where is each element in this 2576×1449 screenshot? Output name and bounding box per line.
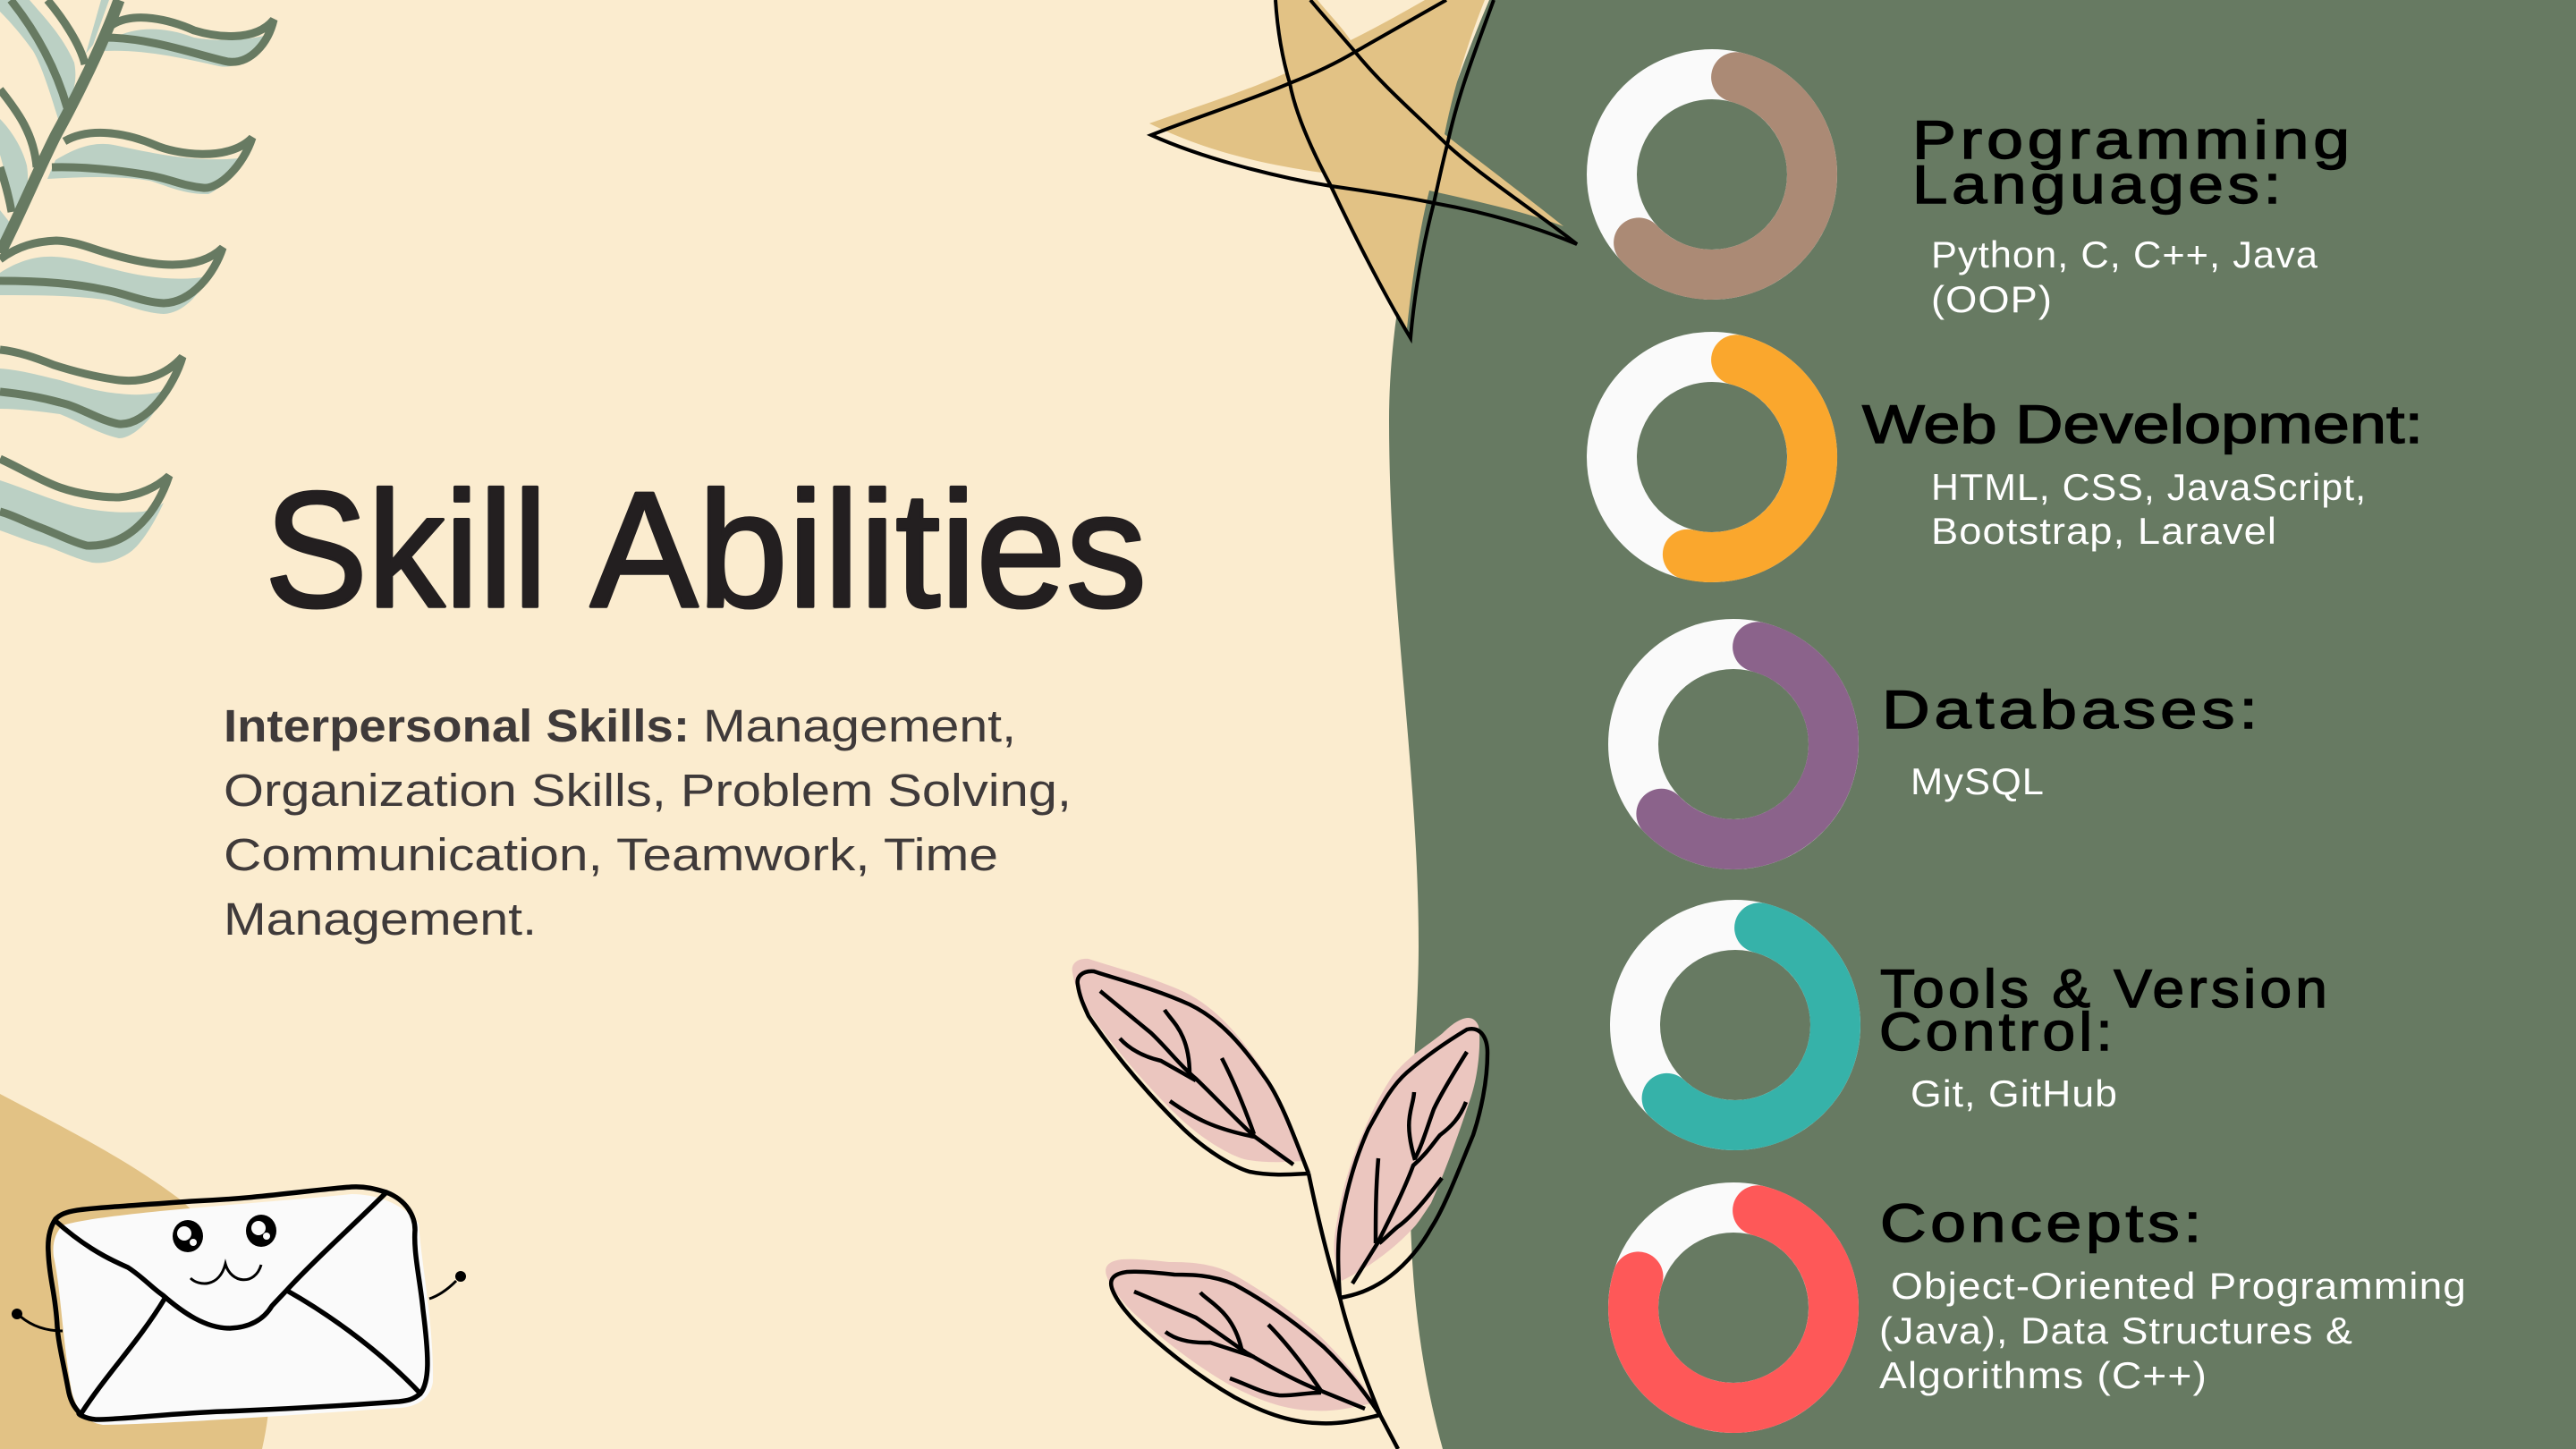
title: Skill: [265, 457, 547, 641]
chart: programming languages donut: [1612, 74, 1812, 275]
text block: interpersonal skills: Management.: [224, 894, 537, 945]
text block: concepts: [1879, 1193, 2467, 1396]
chart: web development donut: [1612, 357, 1812, 557]
text block: interpersonal skills: Organization Skills, Problem Solving,: [224, 765, 1072, 816]
text block: programming languages: [1912, 110, 2354, 320]
text block: tools and version control: Tools & Version: [1880, 959, 2331, 1019]
chart: concepts donut: [1633, 1208, 1834, 1408]
text block: interpersonal skills: [224, 700, 1072, 945]
text block: programming languages: Programming: [1912, 110, 2354, 170]
text block: programming languages: Languages:: [1912, 155, 2285, 215]
title: [265, 457, 1147, 641]
text block: interpersonal skills: Management,: [703, 700, 1016, 751]
text block: web development: Bootstrap, Laravel: [1931, 510, 2277, 552]
title: Abilities: [590, 457, 1147, 641]
tan corner shape: [0, 1094, 270, 1449]
icon: smiling envelope: [12, 1187, 466, 1425]
icon: star: [1149, 0, 1577, 338]
text block: web development: Web Development:: [1862, 394, 2423, 454]
text block: databases: MySQL: [1911, 760, 2045, 802]
text block: interpersonal skills: Interpersonal Skills:: [224, 700, 690, 751]
text block: concepts: Object-Oriented Programming: [1891, 1265, 2467, 1307]
text block: concepts: Algorithms (C++): [1879, 1354, 2207, 1396]
text block: concepts: (Java), Data Structures &: [1879, 1309, 2353, 1352]
text block: web development: [1862, 394, 2423, 552]
text block: databases: [1882, 680, 2262, 802]
text block: tools and version control: Git, GitHub: [1911, 1072, 2118, 1114]
text block: concepts: Concepts:: [1880, 1193, 2206, 1253]
text block: programming languages: (OOP): [1931, 278, 2053, 320]
icon: pink leaf sprig: [1072, 959, 1487, 1449]
text block: interpersonal skills: Communication, Teamwork, Time: [224, 829, 998, 880]
text block: programming languages: Python, C, C++, Java: [1931, 233, 2318, 275]
text block: tools and version control: [1879, 959, 2331, 1114]
chart: databases donut: [1633, 644, 1834, 844]
panel: green skills background: [1389, 0, 2576, 1449]
icon: fern branch: [0, 0, 274, 563]
chart: tools donut: [1635, 925, 1835, 1125]
text block: web development: HTML, CSS, JavaScript,: [1931, 466, 2367, 508]
text block: tools and version control: Control:: [1879, 1002, 2116, 1062]
text block: databases: Databases:: [1882, 680, 2262, 740]
